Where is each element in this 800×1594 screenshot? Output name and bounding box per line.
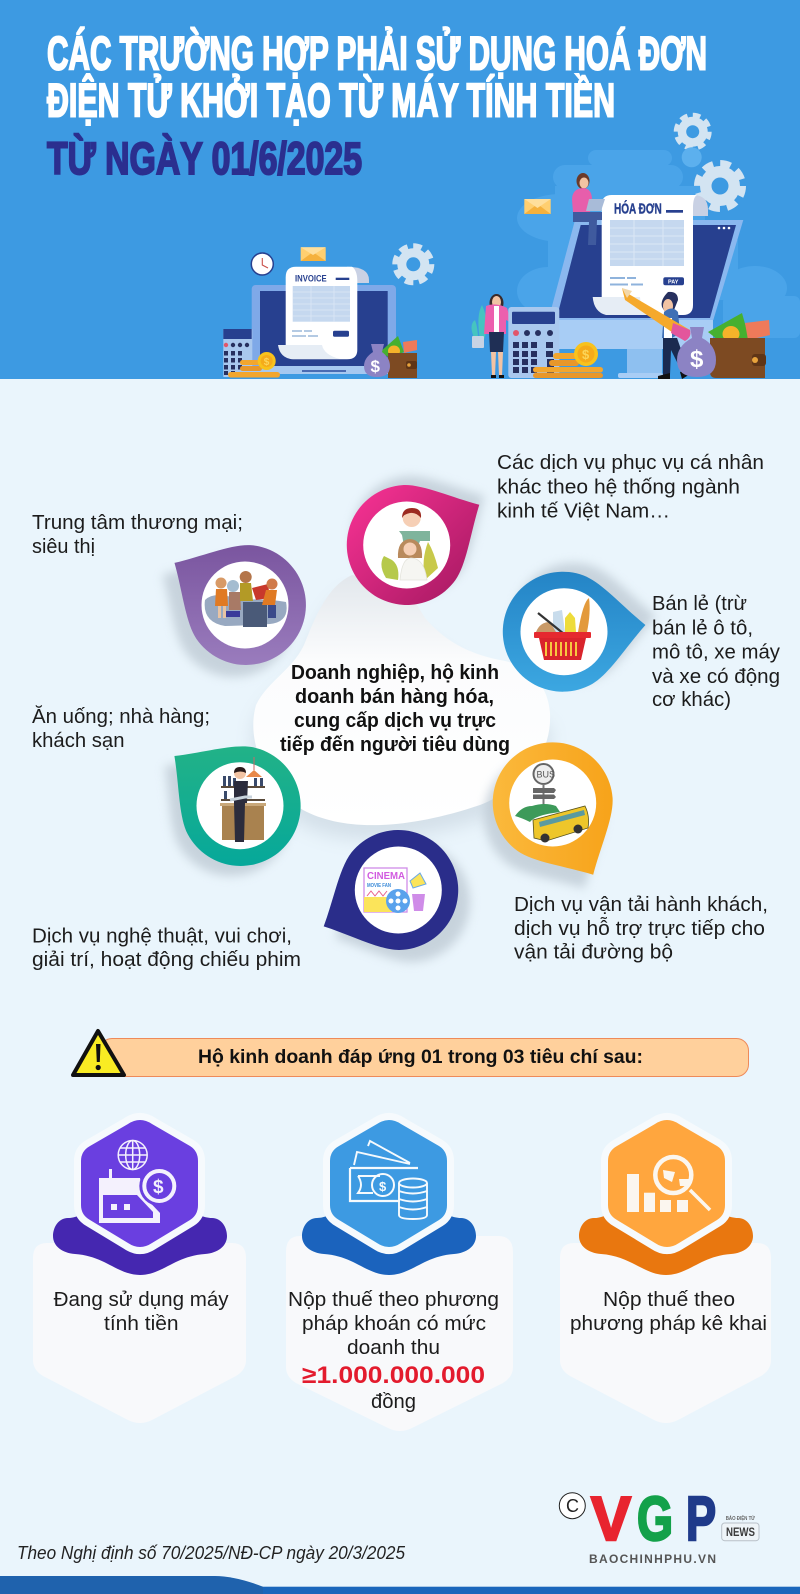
illustration: monitor with hóa đơn [548, 195, 743, 378]
V: V [591, 1485, 631, 1554]
pin: transport [462, 721, 646, 918]
icon: gear left [395, 246, 431, 282]
illustration: money bag and wallet right [677, 313, 770, 378]
card text: pháp khoán có mức [302, 1313, 486, 1335]
illustration: calculator left [223, 329, 252, 377]
illustration: calculator right [508, 307, 559, 378]
icon: register with globe [99, 1140, 179, 1223]
G: G [637, 1485, 673, 1554]
icon: shopping basket [534, 598, 591, 660]
illustration: monitor with hóa đơn: PAY [668, 280, 679, 286]
illustration: coins left [228, 352, 280, 378]
news box: NEWS [726, 1525, 755, 1539]
card text: Đang sử dụng máy [54, 1289, 229, 1311]
text: transport [514, 894, 768, 964]
illustration: coins right [533, 342, 603, 378]
background clouds [517, 150, 800, 338]
ribbon [302, 1200, 476, 1275]
icon: cinema poster: MOVIE FAN [367, 883, 391, 889]
card: flat tax revenue [286, 1120, 513, 1431]
subtitle date: TỪ NGÀY 01/6/2025 [47, 133, 362, 184]
card background [33, 1243, 246, 1423]
icon: gears right [676, 115, 742, 208]
banner text: Hộ kinh doanh đáp ứng 01 trong 03 tiêu chí sau: [198, 1047, 643, 1068]
criteria banner [73, 1031, 748, 1076]
card background [286, 1236, 513, 1431]
card text: đồng [371, 1391, 416, 1413]
logo: VGP [559, 1485, 759, 1566]
text: retail [652, 593, 780, 711]
icon: bartender [220, 757, 266, 842]
illustration: woman with phone and plant [472, 294, 514, 378]
icon: hair salon [381, 508, 438, 580]
illustration: money bag and wallet left: $ [370, 357, 380, 376]
news box [722, 1523, 759, 1541]
icon: shoppers [205, 571, 287, 627]
icon: warning triangle [73, 1031, 124, 1075]
illustration: coins right: $ [582, 347, 590, 362]
text: food and drink: khách sạn [32, 730, 124, 752]
hexagon badge [608, 1120, 725, 1247]
ribbon [579, 1200, 753, 1275]
text: arts and cinema: Dịch vụ nghệ thuật, vui chơi, [32, 926, 292, 948]
text: retail: cơ khác) [652, 689, 731, 711]
text: personal services: Các dịch vụ phục vụ cá nhân [497, 452, 764, 474]
card text: doanh thu [347, 1337, 440, 1359]
text: shopping mall: Trung tâm thương mại; [32, 512, 243, 534]
text: retail: mô tô, xe máy [652, 642, 780, 664]
ribbon [53, 1200, 227, 1275]
text: retail: bán lẻ ô tô, [652, 618, 753, 640]
text: transport: dịch vụ hỗ trợ trực tiếp cho [514, 917, 765, 940]
card text: phương pháp kê khai [570, 1313, 767, 1335]
footer bar [0, 1576, 800, 1594]
icon: chart with magnifier [627, 1157, 710, 1212]
illustration: woman with laptop [572, 173, 605, 245]
icon: bus and stop: BUS [536, 770, 555, 780]
icon: envelope left [301, 247, 326, 261]
pin: food and drink [129, 708, 325, 900]
hóa đơn label: HÓA ĐƠN [614, 199, 662, 217]
dollar sign: $ [153, 1177, 164, 1198]
dollar sign: $ [379, 1179, 387, 1194]
invoice label: INVOICE [295, 274, 327, 285]
icon: cinema poster [364, 868, 426, 913]
copyright mark: C [566, 1496, 579, 1516]
hexagon badge [81, 1120, 198, 1247]
central text: tiếp đến người tiêu dùng [280, 734, 510, 756]
central text [280, 662, 510, 756]
illustration: money bag and wallet left [364, 336, 417, 378]
card text [288, 1289, 499, 1413]
card text [570, 1289, 767, 1335]
copyright mark [559, 1493, 585, 1519]
pin: retail [498, 557, 661, 696]
card: cash register [33, 1120, 246, 1423]
card background [560, 1243, 771, 1423]
icon: envelope right [524, 199, 551, 214]
text: arts and cinema [32, 926, 301, 971]
P: P [686, 1485, 716, 1554]
pin: cinema [297, 810, 490, 992]
pin: shopping mall [132, 511, 328, 699]
text: arts and cinema: giải trí, hoạt động chiếu phim [32, 949, 301, 971]
source note: Theo Nghị định số 70/2025/NĐ-CP ngày 20/3/2025 [17, 1543, 406, 1563]
icon: clock [251, 253, 273, 275]
icon: cinema poster: CINEMA [367, 870, 405, 882]
icon: banknotes and coins [350, 1141, 427, 1219]
text: shopping mall [32, 512, 243, 558]
icon: bus and stop [515, 764, 589, 842]
illustration: coins left: $ [264, 357, 270, 368]
text: food and drink [32, 705, 210, 752]
text: transport: Dịch vụ vận tải hành khách, [514, 894, 768, 916]
text: personal services [497, 452, 764, 522]
site name: BAOCHINHPHU.VN [589, 1552, 716, 1566]
text: transport: vận tải đường bộ [514, 942, 673, 964]
card text [54, 1289, 229, 1335]
hexagon badge [330, 1120, 447, 1247]
text: personal services: khác theo hệ thống ngành [497, 476, 740, 498]
title [47, 26, 707, 126]
card: declaration method [560, 1120, 771, 1423]
central text: doanh bán hàng hóa, [295, 686, 494, 708]
card text: tính tiền [104, 1313, 179, 1335]
illustration: man with pencil [622, 288, 692, 379]
text: retail: Bán lẻ (trừ [652, 593, 747, 615]
tiny caption: BÁO ĐIỆN TỬ [726, 1514, 756, 1522]
card text: ≥1.000.000.000 [302, 1362, 485, 1389]
illustration: laptop with invoice [252, 267, 396, 374]
text: personal services: kinh tế Việt Nam… [497, 500, 670, 522]
central text: Doanh nghiệp, hộ kinh [291, 662, 499, 684]
header banner [0, 0, 800, 379]
card text: Nộp thuế theo phương [288, 1289, 499, 1311]
text: shopping mall: siêu thị [32, 536, 95, 558]
central text: cung cấp dịch vụ trực [294, 710, 496, 732]
pin: personal services [325, 443, 514, 627]
text: retail: và xe có động [652, 666, 780, 688]
panel: central blob [253, 575, 550, 839]
text: food and drink: Ăn uống; nhà hàng; [32, 705, 210, 728]
illustration: money bag and wallet right: $ [690, 346, 704, 373]
card text: Nộp thuế theo [603, 1289, 735, 1311]
